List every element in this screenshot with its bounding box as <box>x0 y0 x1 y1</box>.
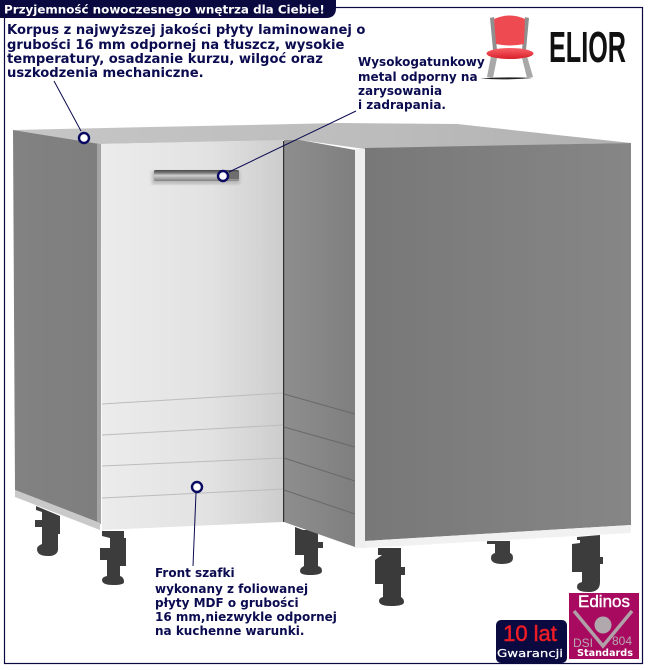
callout: front: 16 mm,niezwykle odpornej <box>155 610 337 624</box>
callout: front: płyty MDF o grubości <box>155 596 299 610</box>
cabinet top <box>13 123 631 149</box>
callout: body: Korpus z najwyższej jakości płyty laminowanej o <box>7 23 365 38</box>
leg: rear right <box>487 541 513 564</box>
callout: handle material: metal odporny na <box>358 70 478 84</box>
title banner: Przyjemność nowoczesnego wnętrza dla Ciebie! <box>4 2 325 16</box>
handle <box>152 170 240 184</box>
inner side panel <box>284 140 355 547</box>
callout: body: uszkodzenia mechaniczne. <box>7 66 204 81</box>
cabinet illustration <box>13 123 631 606</box>
badge: 10 year warranty: Gwarancji <box>497 647 563 660</box>
badge: Edinos standards <box>569 592 639 659</box>
left plinth strip <box>15 490 100 530</box>
callout: front: Front szafki <box>155 566 235 580</box>
badge: Edinos standards: Standards <box>577 648 633 659</box>
icon: red chair <box>480 16 534 79</box>
callout: front: wykonany z foliowanej <box>155 582 308 596</box>
right door <box>365 143 631 541</box>
badge: Edinos standards: DSI <box>573 636 593 650</box>
leg: far right <box>572 535 603 592</box>
left side panel <box>13 130 100 523</box>
callout: handle material: zarysowania <box>358 84 442 98</box>
right plinth strip <box>365 525 631 548</box>
callout: body: grubości 16 mm odpornej na tłuszcz, wysokie <box>7 38 344 53</box>
front grooves <box>102 393 283 498</box>
callout: handle material: i zadrapania. <box>358 98 446 112</box>
leg: front left <box>100 531 126 585</box>
badge: Edinos standards: Edinos <box>578 592 630 611</box>
front panel <box>101 140 283 530</box>
badge: Edinos standards: 804 <box>612 634 632 648</box>
leg: front right <box>375 548 405 606</box>
callout: front: na kuchenne warunki. <box>155 624 304 638</box>
callout: body <box>7 23 365 143</box>
leg: centre <box>295 527 323 575</box>
white door edge <box>355 149 365 548</box>
badge: 10 year warranty: 10 lat <box>503 621 557 646</box>
callout: front <box>155 482 337 638</box>
leg: rear left <box>35 506 60 556</box>
callout: handle material <box>218 55 485 181</box>
callout: body: temperatury, osadzanie kurzu, wilgoć oraz <box>7 52 323 67</box>
badge: 10 year warranty <box>496 620 567 663</box>
callout: handle material: Wysokogatunkowy <box>358 55 485 69</box>
